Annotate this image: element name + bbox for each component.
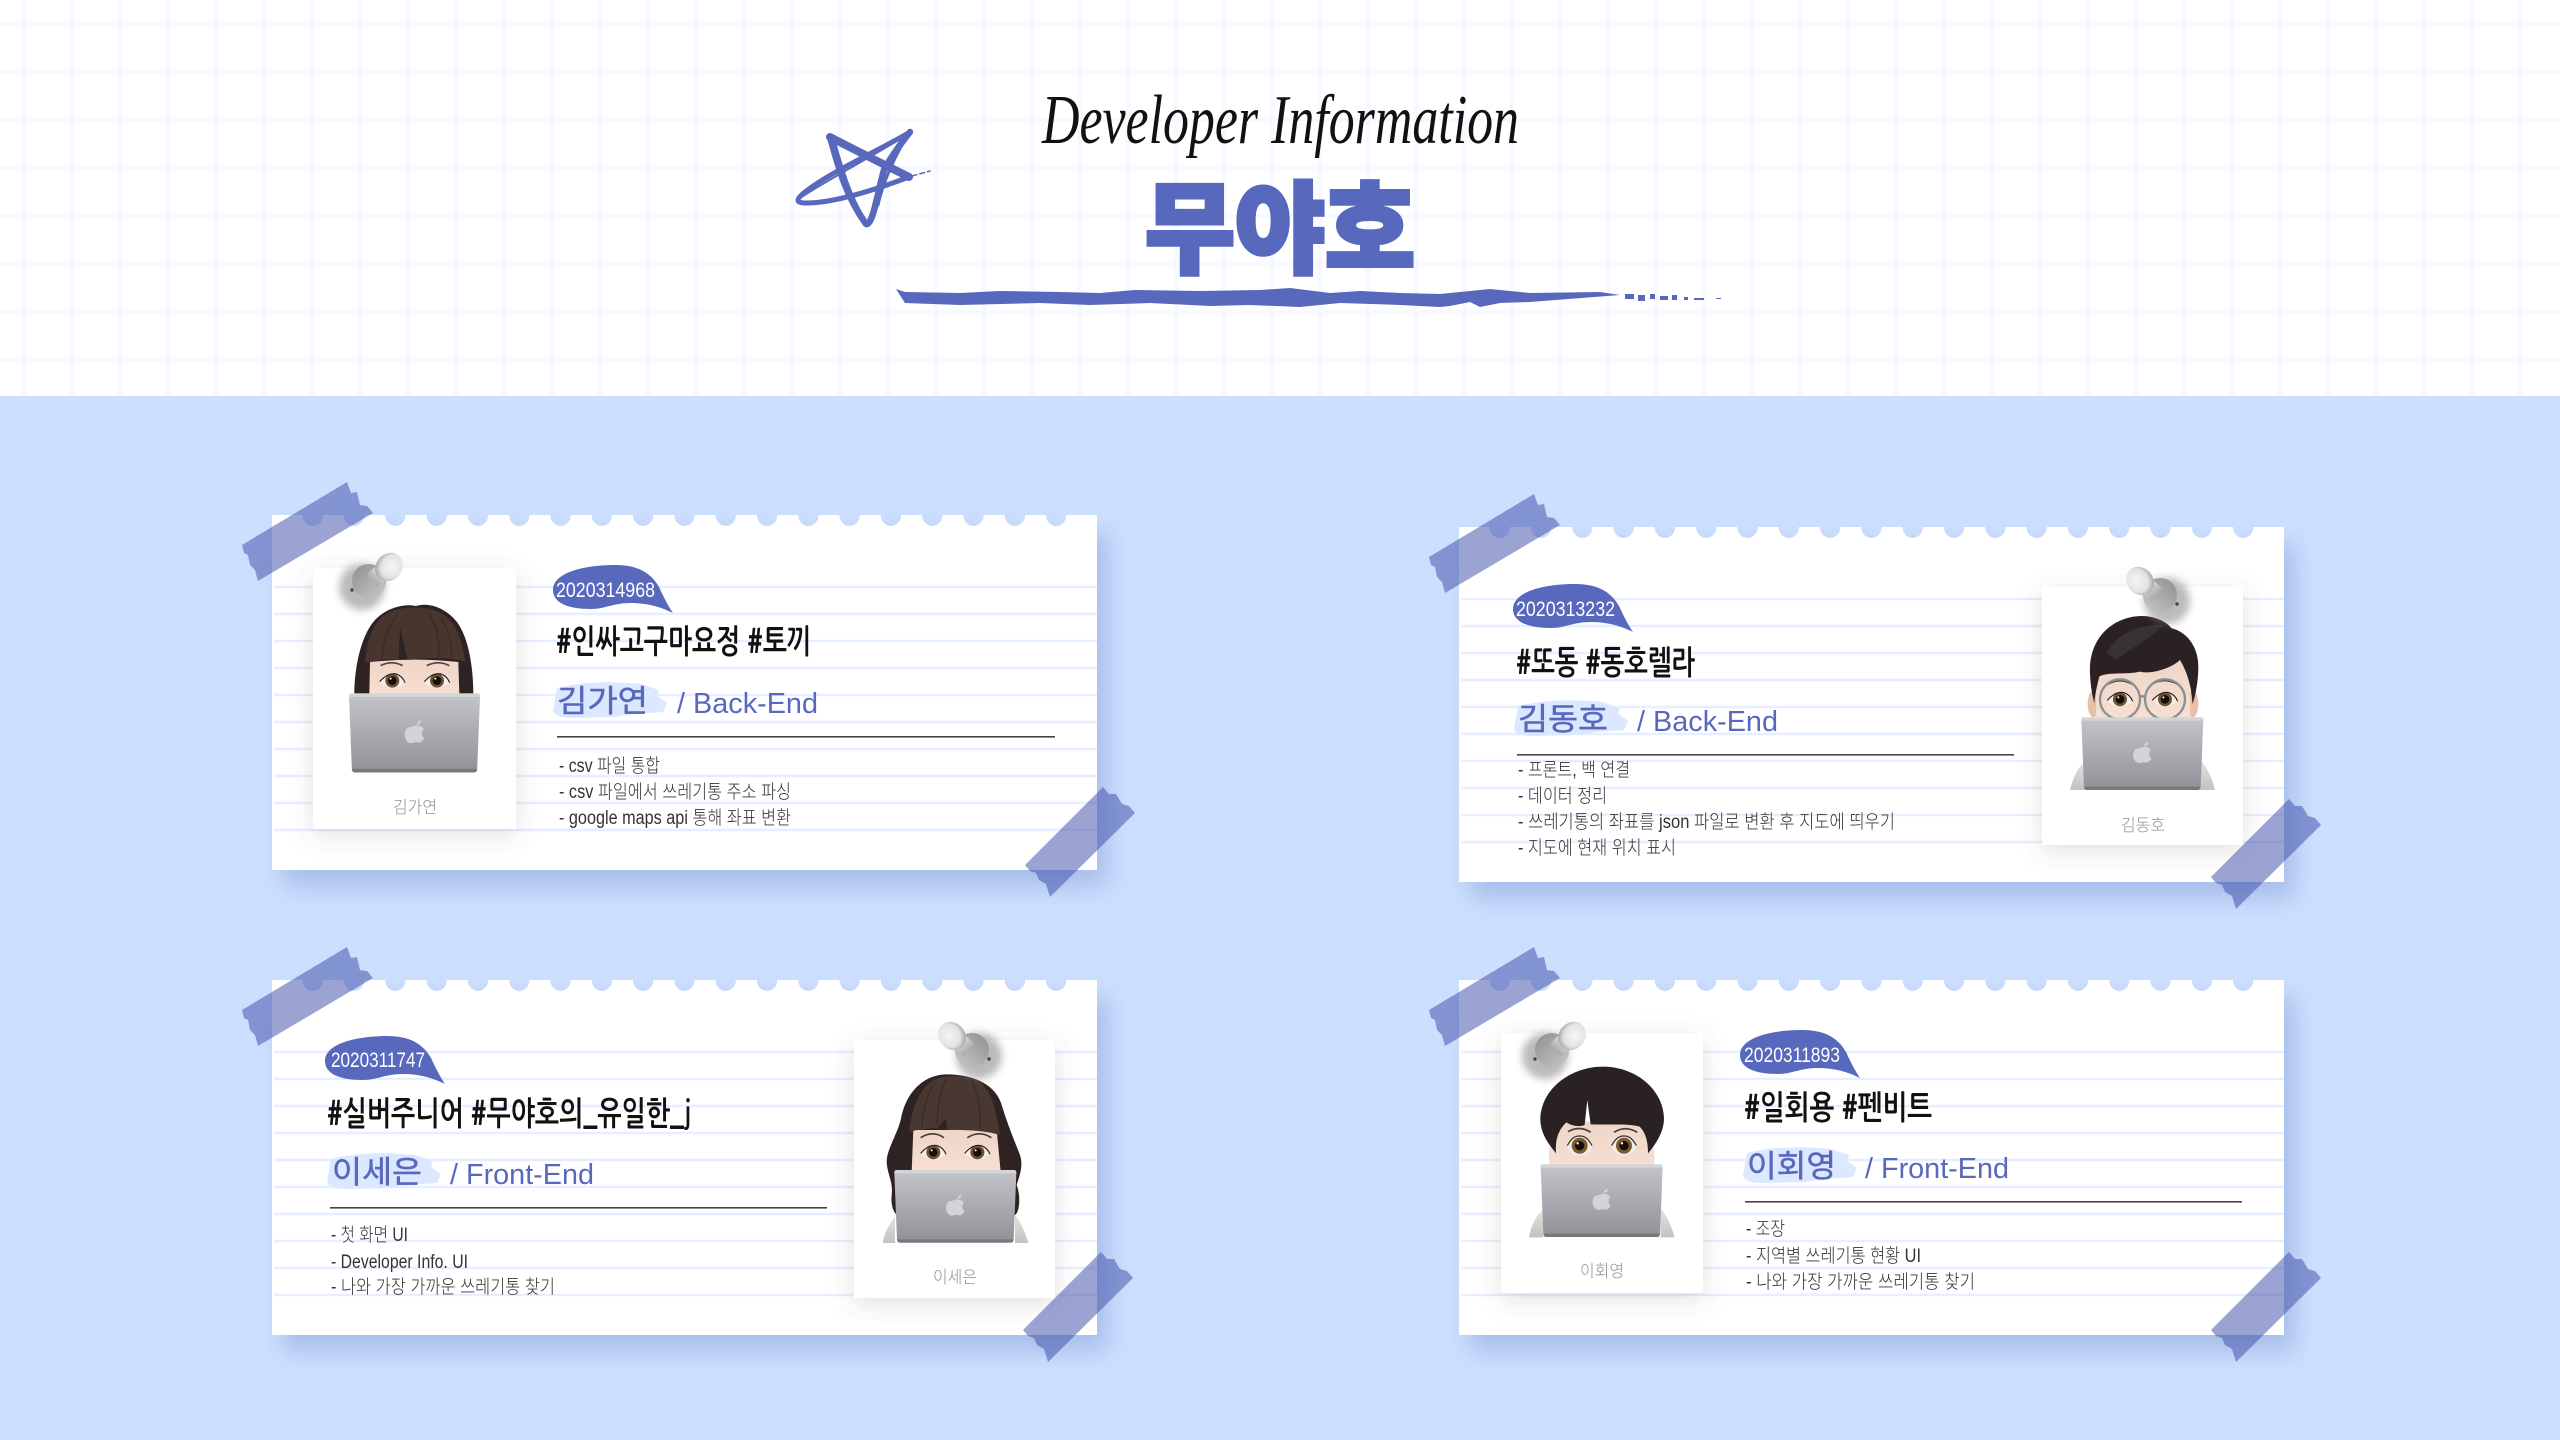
tape: top left — [242, 947, 373, 1046]
student id badge: 2020311893 — [1744, 1044, 1840, 1067]
student id badge: 2020313232 — [1516, 598, 1615, 621]
photo caption: 이회영 — [1580, 1257, 1624, 1282]
name and role — [553, 676, 818, 721]
avatar with laptop — [349, 605, 480, 773]
panel: developer card 2 (김동호) — [1429, 494, 2321, 909]
name and role: 김가연 — [557, 676, 648, 721]
name and role: 이회영 — [1747, 1141, 1836, 1186]
task list: - 나와 가장 가까운 쓰레기통 찾기 — [331, 1276, 555, 1298]
task list: - Developer Info. UI — [331, 1252, 468, 1273]
student id badge — [553, 565, 673, 613]
tape: bottom right — [1023, 1252, 1133, 1362]
tape: top left — [1429, 947, 1560, 1046]
pushpin — [339, 547, 409, 610]
pushpin — [1522, 1016, 1592, 1079]
student id badge — [1740, 1030, 1860, 1078]
panel: developer card 4 (이회영) — [1429, 947, 2321, 1362]
student id badge: 2020314968 — [556, 579, 655, 602]
name and role — [1514, 694, 1778, 739]
student id badge: 2020311747 — [331, 1049, 425, 1072]
icon: scribbled star — [798, 132, 930, 224]
task list: - 지역별 쓰레기통 현황 UI — [1746, 1245, 1921, 1267]
task list — [1746, 1218, 1975, 1293]
name and role — [1743, 1141, 2009, 1186]
task list: - 첫 화면 UI — [331, 1224, 408, 1246]
paper note — [1459, 980, 2284, 1335]
avatar with laptop — [1529, 1067, 1675, 1237]
tape: bottom right — [2211, 799, 2321, 909]
name and role: / Back-End — [677, 688, 818, 720]
task list: - 나와 가장 가까운 쓰레기통 찾기 — [1746, 1271, 1975, 1293]
student id badge — [325, 1036, 445, 1084]
hashtags: #일회용 #펜비트 — [1744, 1091, 1932, 1124]
pushpin — [932, 1016, 1002, 1079]
tape: bottom right — [1025, 787, 1135, 897]
photo caption: 김가연 — [393, 793, 437, 818]
task list: - google maps api 통해 좌표 변환 — [559, 807, 791, 829]
task list: - 조장 — [1746, 1218, 1785, 1240]
name and role: 이세은 — [332, 1147, 422, 1192]
task list: - 프론트, 백 연결 — [1518, 759, 1630, 781]
name and role: 김동호 — [1518, 694, 1608, 739]
name and role: / Front-End — [1865, 1153, 2009, 1185]
photo card — [1501, 1033, 1703, 1293]
pushpin — [2120, 561, 2190, 624]
tape: top left — [242, 482, 373, 581]
name and role — [327, 1147, 594, 1192]
heading: Developer Information: Developer Information — [1041, 82, 1519, 159]
avatar with laptop — [2070, 616, 2215, 790]
paper note — [272, 515, 1097, 870]
name and role: / Front-End — [450, 1159, 594, 1191]
header: title block — [798, 82, 1721, 307]
divider — [1745, 1201, 2242, 1203]
task list — [559, 755, 791, 829]
task list: - 지도에 현재 위치 표시 — [1518, 837, 1676, 859]
photo card — [2042, 587, 2243, 845]
task list: - csv 파일에서 쓰레기통 주소 파싱 — [559, 781, 791, 803]
task list: - 쓰레기통의 좌표를 json 파일로 변환 후 지도에 띄우기 — [1518, 811, 1895, 833]
tape: bottom right — [2211, 1252, 2321, 1362]
blue lower background — [0, 396, 2560, 1440]
grid paper header background — [0, 0, 2560, 396]
heading: team name: 무야호 — [1145, 149, 1415, 294]
avatar with laptop — [883, 1074, 1028, 1243]
photo card — [854, 1040, 1055, 1298]
divider — [1517, 754, 2014, 756]
paper note — [272, 980, 1097, 1335]
task list: - 데이터 정리 — [1518, 785, 1607, 807]
tape: top left — [1429, 494, 1560, 593]
name and role: / Back-End — [1637, 706, 1778, 738]
photo caption: 이세은 — [933, 1263, 977, 1288]
task list: - csv 파일 통합 — [559, 755, 660, 777]
panel: developer card 3 (이세은) — [242, 947, 1133, 1362]
task list — [1518, 759, 1895, 859]
task list — [331, 1224, 555, 1298]
hashtags: #또동 #동호렐라 — [1516, 646, 1695, 679]
hashtags: #인싸고구마요정 #토끼 — [556, 625, 811, 658]
brush underline — [896, 288, 1721, 307]
photo card — [313, 568, 516, 829]
panel: developer card 1 (김가연) — [242, 482, 1135, 897]
photo caption: 김동호 — [2121, 811, 2165, 836]
divider — [557, 736, 1055, 738]
hashtags: #실버주니어 #무야호의_유일한_j — [327, 1097, 691, 1130]
student id badge — [1513, 584, 1633, 632]
divider — [330, 1207, 827, 1209]
paper note — [1459, 527, 2284, 882]
